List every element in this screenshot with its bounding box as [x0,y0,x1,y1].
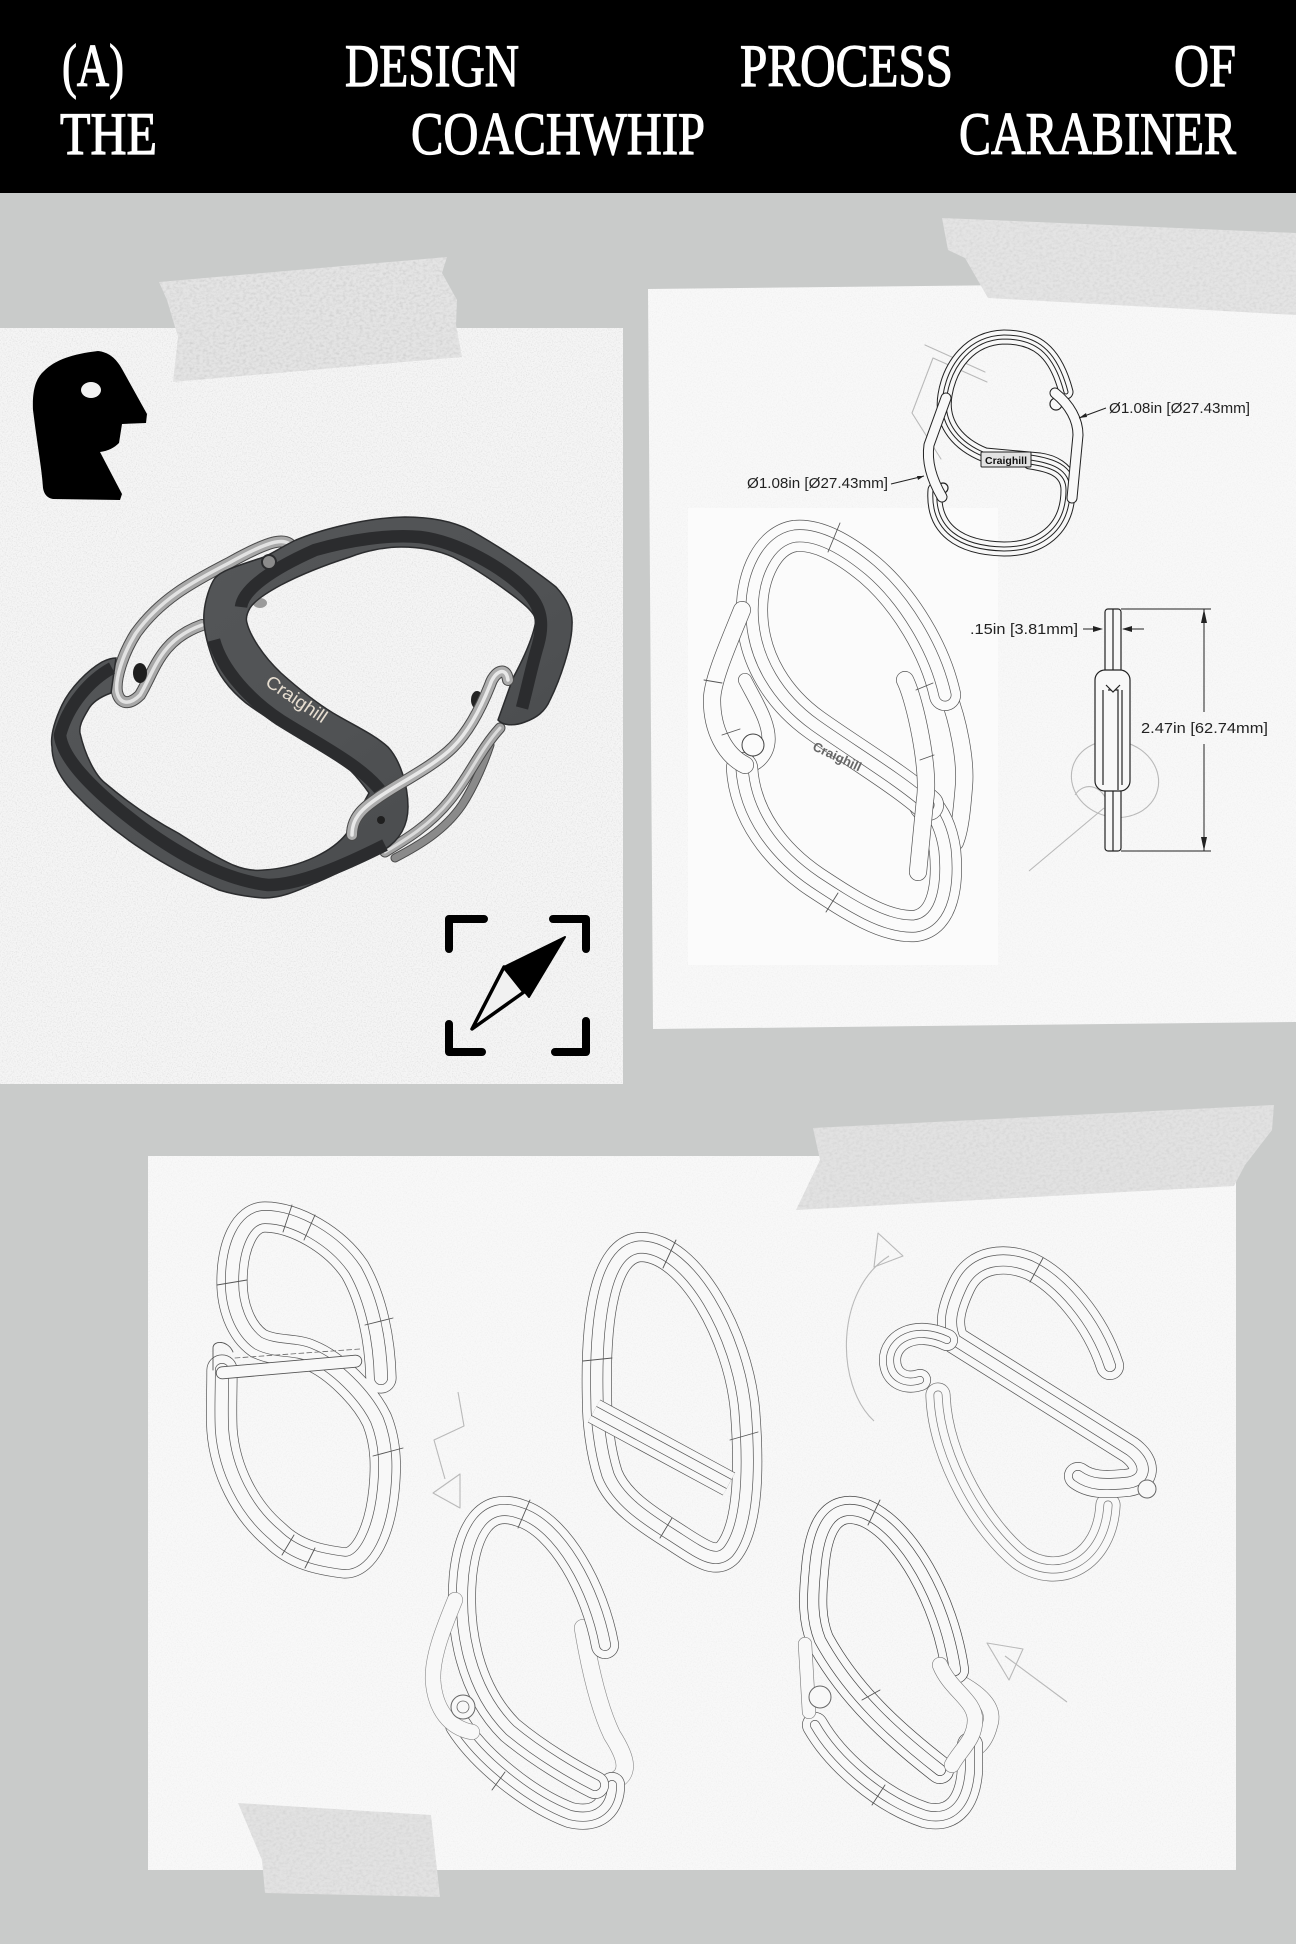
title: OF [1174,33,1236,99]
title: PROCESS [740,33,953,99]
sketch 4: carabiner with loose gates [433,1500,625,1817]
dimension labels: diameter: Ø1.08in [Ø27.43mm] [1109,400,1250,417]
dimension labels: diameter [747,400,1250,492]
front wire gate [352,672,508,835]
rear rivets [253,598,483,709]
technical drawing: side view with dimensions [970,609,1268,871]
icon: head silhouette [33,351,147,500]
front rivets [133,555,385,824]
carabiner body [52,517,572,898]
dimension labels: diameter: Ø1.08in [Ø27.43mm] [747,475,888,492]
tape: top right of sketches panel [796,1105,1274,1210]
engraved brand: Craighill [262,671,331,727]
pencil sketch over side view [1029,731,1167,871]
dimension lines [970,609,1268,851]
title [60,33,1236,167]
rod and carriage [1095,609,1130,851]
construction sketch marks [912,345,987,459]
dimension lines: .15in [3.81mm] [970,621,1078,638]
sketch 2: D shape with crossbar [583,1240,758,1557]
arrow: curved rotation near sketch 3 [846,1233,903,1421]
sketch 1: closed figure-eight body [213,1205,403,1568]
arrow: pointing at sketch 5 [987,1643,1067,1702]
header band [0,0,1296,193]
brand plate [981,452,1031,467]
arrow: sketch 1 to sketch 4 [433,1392,464,1508]
panel: concept sketches paper [148,1156,1236,1870]
title: THE [60,101,157,167]
title: COACHWHIP [411,101,705,167]
wire gate across waist [213,1342,362,1379]
body dark chamfer bands [60,536,541,885]
technical drawing: top view carabiner [912,337,1078,549]
tape: top of photo panel [159,257,462,382]
dimension lines: 2.47in [62.74mm] [1141,720,1268,737]
tape: bottom left of sketches panel [238,1803,440,1897]
title: DESIGN [345,33,519,99]
title: CARABINER [959,101,1236,167]
title: (A) [62,33,124,99]
icon: compass in viewfinder [449,919,586,1052]
sketch 5: carabiner with crimped gates [805,1500,991,1816]
sketch 3: open body with wire gate [890,1258,1156,1569]
technical drawing: large isometric carabiner [704,523,964,926]
panel: product photo paper [0,328,623,1084]
tape: top right of drawing panel [942,218,1296,315]
product photo: anodized carabiner [52,517,572,898]
technical drawing: large isometric carabiner: Craighill [810,739,864,774]
panel: technical drawing paper [648,282,1296,1029]
brand plate: Craighill [985,455,1027,467]
rear wire gates [117,541,500,858]
